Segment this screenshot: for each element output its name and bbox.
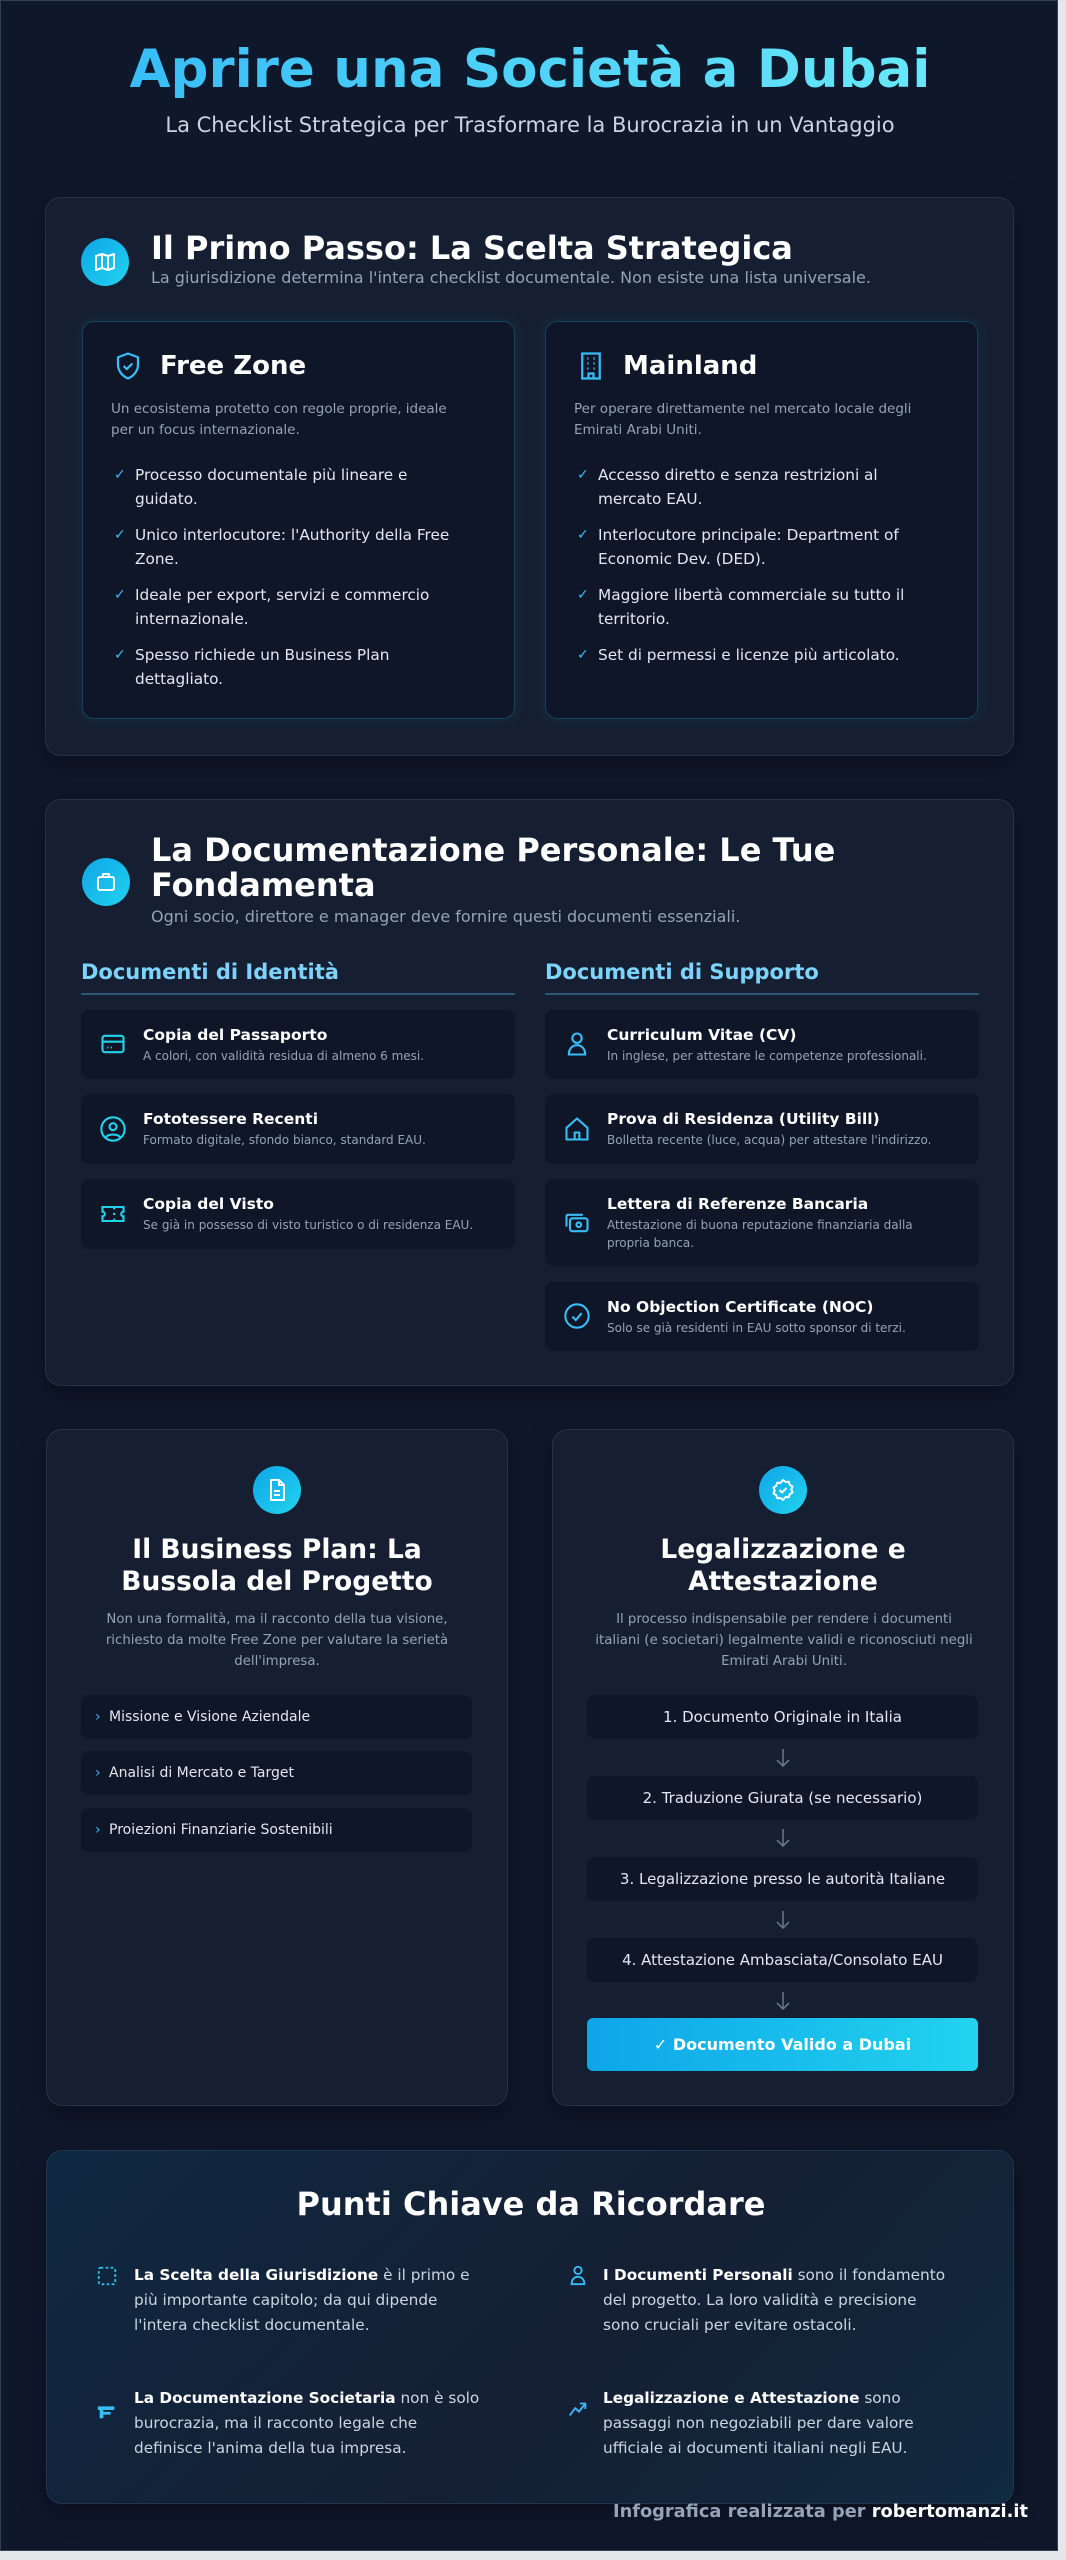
bullet list: ✓ <box>114 587 126 603</box>
flow: legalization steps <box>587 1695 978 2071</box>
key point 1: La Scelta della Giurisdizione è il primo e più importante capitolo; da qui dipende l'intera checklist documentale. <box>134 2266 470 2334</box>
icon: check circle <box>564 1303 590 1329</box>
card title: Free Zone <box>160 351 306 381</box>
bullet list: Accesso diretto e senza restrizioni al mercato EAU. <box>598 466 878 508</box>
bullet list: Maggiore libertà commerciale su tutto il territorio. <box>598 586 904 628</box>
list: business plan items: Analisi di Mercato e Target <box>109 1765 294 1781</box>
heading: Il Business Plan: La <box>132 1534 422 1565</box>
doc: fototessere <box>81 1094 515 1164</box>
list: business plan items: › <box>95 1822 101 1838</box>
icon: money <box>565 1214 589 1232</box>
bullet list: ✓ <box>577 647 589 663</box>
list: business plan items: › <box>95 1765 101 1781</box>
list: business plan items <box>81 1695 472 1852</box>
bullet list: ✓ <box>577 587 589 603</box>
column heading: supporto: Documenti di Supporto <box>545 960 819 984</box>
subheading: Ogni socio, direttore e manager deve fornire questi documenti essenziali. <box>151 907 740 926</box>
icon: user <box>568 1032 586 1056</box>
subheading: La giurisdizione determina l'intera checklist documentale. Non esiste una lista universale. <box>151 268 871 287</box>
icon: document <box>253 1466 301 1514</box>
bullet list: ✓ <box>114 467 126 483</box>
doc: noc: Solo se già residenti in EAU sotto sponsor di terzi. <box>607 1321 906 1335</box>
icon: briefcase <box>82 858 130 906</box>
panel: legalizzazione <box>552 1429 1014 2106</box>
doc: residenza <box>545 1094 979 1164</box>
key point 4: Legalizzazione e Attestazione sono passaggi non negoziabili per dare valore ufficiale ai documenti italiani negli EAU. <box>603 2389 914 2457</box>
doc: cv <box>545 1010 979 1079</box>
flow: legalization steps: 4. Attestazione Ambasciata/Consolato EAU <box>622 1951 943 1969</box>
doc: noc: No Objection Certificate (NOC) <box>607 1298 874 1316</box>
doc: residenza: Prova di Residenza (Utility Bill) <box>607 1110 880 1128</box>
flow: legalization steps: 2. Traduzione Giurata (se necessario) <box>643 1789 922 1807</box>
heading: il primo passo: Il Primo Passo: La Scelta Strategica <box>151 229 793 267</box>
description: Non una formalità, ma il racconto della tua visione, richiesto da molte Free Zone per valutare la serietà dell'impresa. <box>106 1612 448 1669</box>
icon: ticket <box>101 1206 125 1222</box>
final badge <box>587 2018 978 2071</box>
icon: portrait <box>100 1116 126 1142</box>
doc: fototessere: Fototessere Recenti <box>143 1110 318 1128</box>
icon: badge check <box>759 1466 807 1514</box>
doc: visto <box>81 1179 515 1249</box>
heading: Punti Chiave da Ricordare <box>297 2185 765 2223</box>
bullet list <box>577 466 904 664</box>
heading <box>121 1534 433 1597</box>
heading: documentazione personale: La Documentazione Personale: Le Tue <box>151 831 835 869</box>
doc: fototessere: Formato digitale, sfondo bianco, standard EAU. <box>143 1133 426 1147</box>
icon: trend up <box>569 2402 586 2416</box>
list: business plan items: Missione e Visione Aziendale <box>109 1709 310 1725</box>
heading: Legalizzazione e <box>660 1534 906 1565</box>
panel: punti chiave <box>46 2150 1014 2504</box>
heading <box>660 1534 906 1597</box>
key point 2: I Documenti Personali sono il fondamento del progetto. La loro validità e precisione sono cruciali per evitare ostacoli. <box>603 2266 945 2334</box>
doc: visto: Se già in possesso di visto turistico o di residenza EAU. <box>143 1218 473 1232</box>
bullet list: Spesso richiede un Business Plan dettagliato. <box>135 646 389 688</box>
footer credit: Infografica realizzata per robertomanzi.it <box>613 2501 1028 2522</box>
icon: building <box>581 352 601 380</box>
doc: visto: Copia del Visto <box>143 1195 274 1213</box>
list: business plan items: › <box>95 1709 101 1725</box>
doc: passaporto: A colori, con validità residua di almeno 6 mesi. <box>143 1049 424 1063</box>
doc: passaporto <box>81 1010 515 1079</box>
card: mainland <box>545 321 978 719</box>
icon: user <box>570 2266 586 2286</box>
bullet list: Ideale per export, servizi e commercio internazionale. <box>135 586 429 628</box>
card description: Per operare direttamente nel mercato locale degli Emirati Arabi Uniti. <box>574 401 911 438</box>
list: business plan items: Proiezioni Finanziarie Sostenibili <box>109 1822 333 1838</box>
doc: noc <box>545 1282 979 1351</box>
bullet list: Set di permessi e licenze più articolato. <box>598 646 900 664</box>
doc: cv: In inglese, per attestare le competenze professionali. <box>607 1049 927 1063</box>
icon: map <box>81 238 129 286</box>
bullet list: ✓ <box>114 647 126 663</box>
heading: Attestazione <box>688 1566 878 1597</box>
card: free zone <box>82 321 515 719</box>
icon: card <box>101 1034 125 1054</box>
card title: Mainland <box>623 351 757 381</box>
heading: documentazione personale: Fondamenta <box>151 866 376 904</box>
doc: referenze bancarie <box>545 1179 979 1266</box>
bullet list: Unico interlocutore: l'Authority della Free Zone. <box>135 526 449 568</box>
subtitle: La Checklist Strategica per Trasformare la Burocrazia in un Vantaggio <box>165 113 895 137</box>
doc: cv: Curriculum Vitae (CV) <box>607 1026 796 1044</box>
heading: documentazione personale <box>151 831 835 904</box>
bullet list: ✓ <box>114 527 126 543</box>
bullet list: Interlocutore principale: Department of Economic Dev. (DED). <box>598 526 899 568</box>
column heading: identità: Documenti di Identità <box>81 960 339 984</box>
bullet list <box>114 466 449 688</box>
icon: shield <box>116 352 140 380</box>
heading: Bussola del Progetto <box>121 1566 433 1597</box>
doc: referenze bancarie: Attestazione di buona reputazione finanziaria dalla propria banca. <box>607 1218 913 1250</box>
flow: legalization steps: 3. Legalizzazione presso le autorità Italiane <box>620 1870 945 1888</box>
bullet list: ✓ <box>577 527 589 543</box>
bullet list: Processo documentale più lineare e guidato. <box>135 466 407 508</box>
panel: documentazione personale <box>45 799 1014 1386</box>
icon: house <box>565 1117 589 1140</box>
doc: residenza: Bolletta recente (luce, acqua) per attestare l'indirizzo. <box>607 1133 931 1147</box>
panel: scelta strategica <box>45 197 1014 756</box>
final badge: ✓ Documento Valido a Dubai <box>654 2035 911 2054</box>
panel: business plan <box>46 1429 508 2106</box>
icon: building mark <box>98 2406 114 2418</box>
description: Il processo indispensabile per rendere i documenti italiani (e societari) legalmente validi e riconosciuti negli Emirati Arabi Uniti. <box>595 1612 973 1669</box>
doc: passaporto: Copia del Passaporto <box>143 1026 327 1044</box>
icon: dashed square <box>98 2266 116 2286</box>
key point 3: La Documentazione Societaria non è solo burocrazia, ma il racconto legale che definisce l'anima della tua impresa. <box>134 2389 479 2457</box>
doc: referenze bancarie: Lettera di Referenze Bancaria <box>607 1195 868 1213</box>
title: Aprire una Società a Dubai <box>130 39 930 100</box>
bullet list: ✓ <box>577 467 589 483</box>
card description: Un ecosistema protetto con regole proprie, ideale per un focus internazionale. <box>111 401 447 438</box>
flow: legalization steps: 1. Documento Originale in Italia <box>663 1708 902 1726</box>
